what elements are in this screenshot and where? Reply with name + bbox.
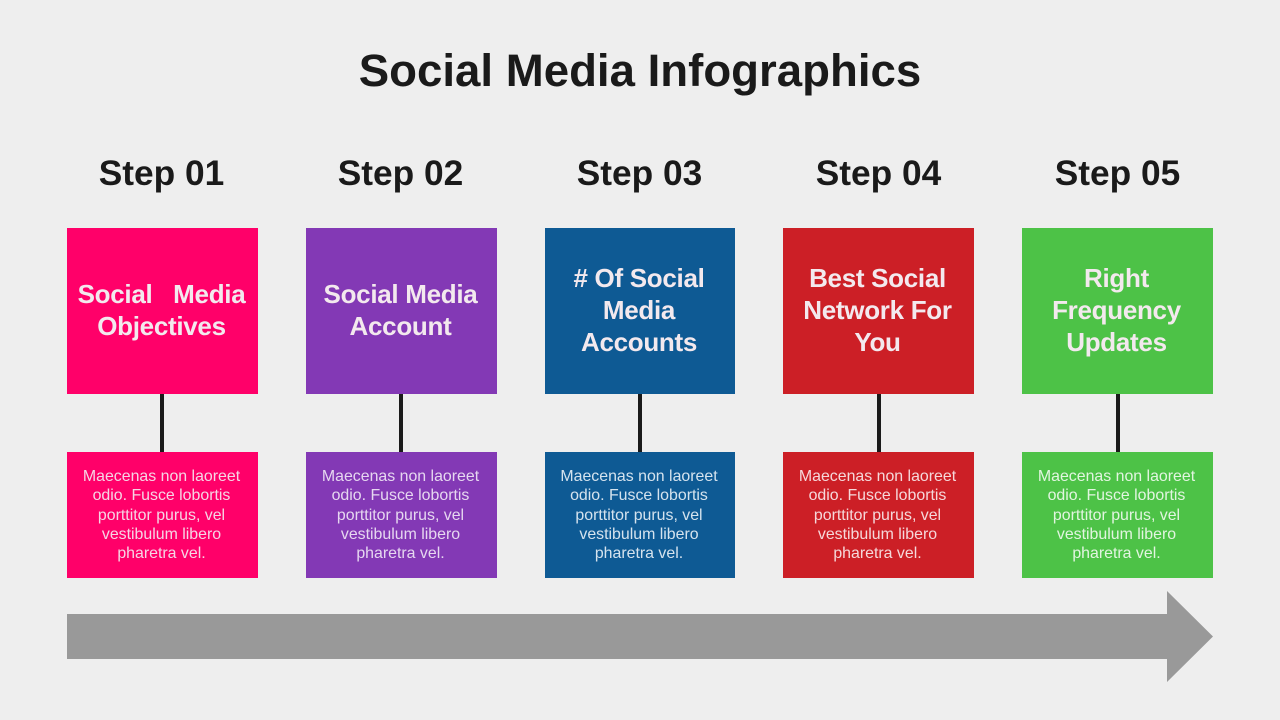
panel: step 01 heading: Social Media <box>78 279 245 309</box>
panel: step 04 description: pharetra vel. <box>833 545 922 562</box>
panel: step 03 description: Maecenas non laoreet <box>560 468 718 485</box>
panel: step 02 heading: Social Media <box>324 279 477 309</box>
panel: step 01 heading <box>67 228 258 394</box>
panel: step 03 description: vestibulum libero <box>579 526 699 543</box>
panel: step 05 heading: Updates <box>1066 327 1167 357</box>
panel: step 04 heading: Best Social <box>809 263 946 293</box>
panel: step 03 description: porttitor purus, vel <box>575 507 703 524</box>
panel: step 04 description: vestibulum libero <box>818 526 937 543</box>
panel: step 05 description: pharetra vel. <box>1072 545 1161 562</box>
panel: step 04 heading <box>783 228 974 394</box>
panel: step 05 description <box>1022 452 1213 578</box>
panel: step 04 description: Maecenas non laoreet <box>799 468 956 485</box>
panel: step 01 heading: Objectives <box>97 311 226 341</box>
panel: step 02 description: odio. Fusce lobortis <box>332 487 469 504</box>
panel: step 04 description <box>783 452 974 578</box>
panel: step 02 description: Maecenas non laoreet <box>322 468 479 485</box>
panel: step 02 description: pharetra vel. <box>356 545 445 562</box>
step 02 label: Step 02 <box>338 154 463 193</box>
panel: step 04 heading: You <box>854 327 901 357</box>
connector 01 <box>160 394 164 452</box>
panel: step 03 heading: Accounts <box>581 327 697 357</box>
panel: step 01 description: pharetra vel. <box>117 545 206 562</box>
panel: step 02 heading <box>306 228 497 394</box>
connector 02 <box>399 394 403 452</box>
panel: step 03 heading: # Of Social <box>573 263 705 293</box>
panel: step 03 description <box>545 452 735 578</box>
title: Social Media Infographics <box>359 45 921 96</box>
connector 03 <box>638 394 642 452</box>
panel: step 03 description: pharetra vel. <box>595 545 683 562</box>
step 05 label: Step 05 <box>1055 154 1180 193</box>
connector 05 <box>1116 394 1120 452</box>
panel: step 01 description: odio. Fusce lobortis <box>93 487 230 504</box>
panel: step 01 description: Maecenas non laoreet <box>83 468 240 485</box>
panel: step 05 heading: Right <box>1084 263 1149 293</box>
panel: step 04 description: porttitor purus, vel <box>814 507 941 524</box>
panel: step 03 heading <box>545 228 735 394</box>
panel: step 05 description: odio. Fusce lobortis <box>1048 487 1185 504</box>
step 04 label: Step 04 <box>816 154 941 193</box>
panel: step 05 heading: Frequency <box>1052 295 1181 325</box>
panel: step 05 description: vestibulum libero <box>1057 526 1176 543</box>
panel: step 01 description: vestibulum libero <box>102 526 221 543</box>
panel: step 05 heading <box>1022 228 1213 394</box>
panel: step 05 description: Maecenas non laoreet <box>1038 468 1195 485</box>
panel: step 02 description: porttitor purus, vel <box>337 507 464 524</box>
connector 04 <box>877 394 881 452</box>
step 01 label: Step 01 <box>99 154 224 193</box>
panel: step 04 description: odio. Fusce lobortis <box>809 487 946 504</box>
panel: step 05 description: porttitor purus, vel <box>1053 507 1180 524</box>
arrow: timeline <box>67 591 1213 682</box>
panel: step 03 heading: Media <box>603 295 675 325</box>
panel: step 01 description <box>67 452 258 578</box>
step 03 label: Step 03 <box>577 154 702 193</box>
panel: step 03 description: odio. Fusce lobortis <box>570 487 708 504</box>
panel: step 02 description <box>306 452 497 578</box>
panel: step 04 heading: Network For <box>803 295 952 325</box>
panel: step 01 description: porttitor purus, vel <box>98 507 225 524</box>
panel: step 02 heading: Account <box>350 311 451 341</box>
panel: step 02 description: vestibulum libero <box>341 526 460 543</box>
